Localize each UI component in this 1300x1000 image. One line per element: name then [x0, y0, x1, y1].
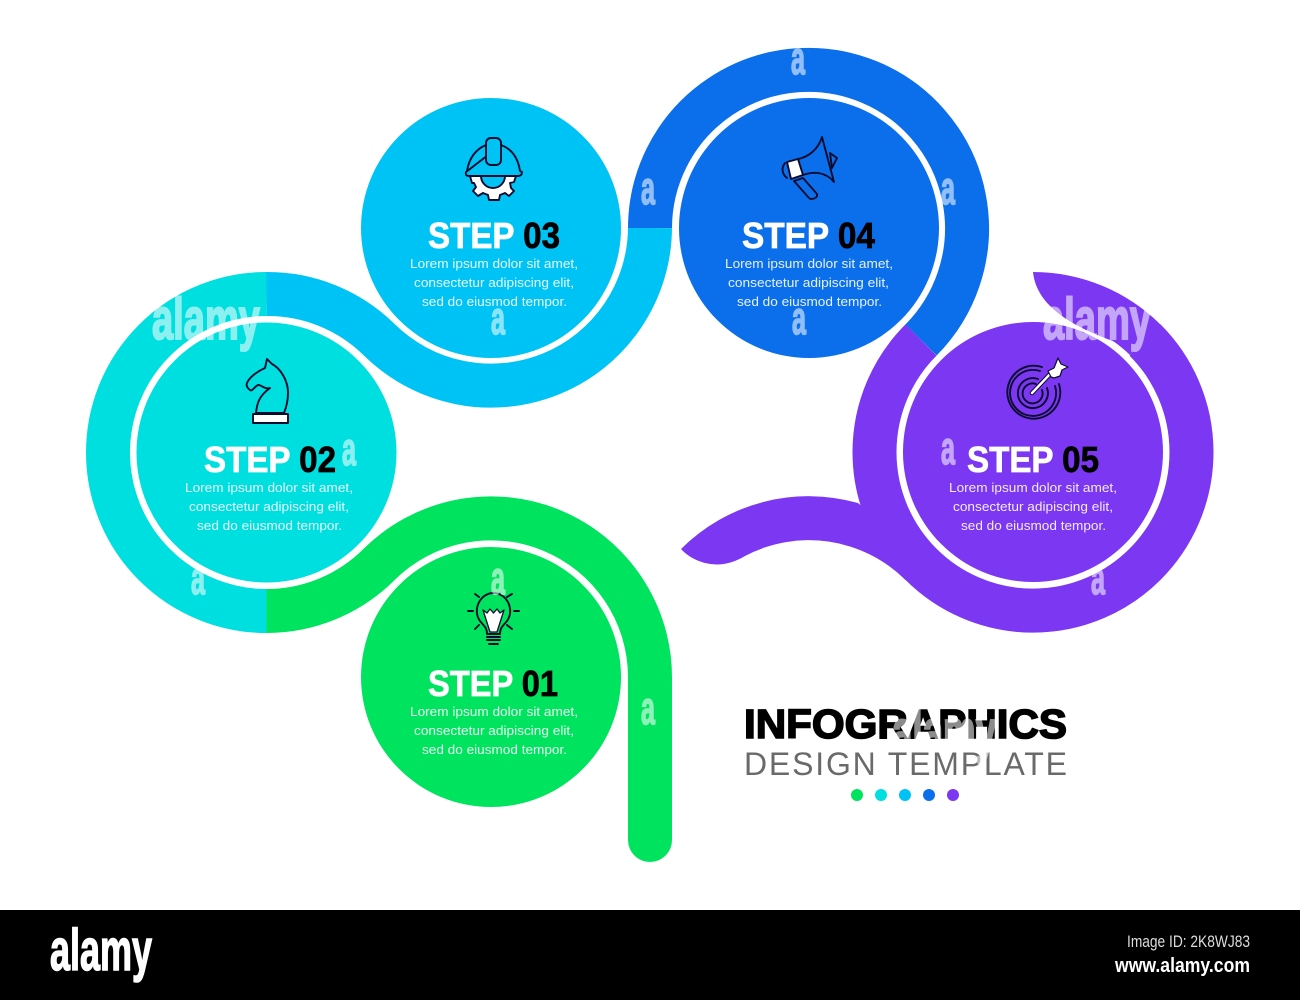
text: step 04 description: sed do eiusmod tempor.	[737, 294, 882, 309]
text: step 01 description	[410, 704, 578, 757]
icon: light bulb	[468, 593, 519, 644]
watermark overlay: alamy	[152, 287, 260, 352]
text: step 05 description	[949, 480, 1117, 533]
watermark overlay: a	[641, 162, 655, 214]
text: step 02 description: Lorem ipsum dolor sit amet,	[185, 480, 353, 495]
text: step 01 description: sed do eiusmod tempor.	[422, 742, 567, 757]
footer url: www.alamy.com	[1114, 955, 1250, 977]
watermark overlay: a	[941, 422, 955, 474]
text: step 03 description	[410, 256, 578, 309]
text: step 05 description: consectetur adipiscing elit,	[953, 499, 1113, 514]
icon: helmet and gear	[466, 138, 522, 200]
watermark overlay: a	[791, 32, 805, 84]
text: step 02 description: sed do eiusmod tempor.	[197, 518, 342, 533]
heading: step 02: STEP 02	[204, 439, 336, 480]
watermark overlay: a	[342, 423, 356, 475]
legend dots	[851, 789, 959, 801]
watermark overlay: alamy	[1043, 287, 1151, 352]
text: step 05 description: Lorem ipsum dolor sit amet,	[949, 480, 1117, 495]
text: step 03 description: consectetur adipiscing elit,	[414, 275, 574, 290]
heading: step 03: STEP 03	[428, 215, 560, 256]
ribbon: green band	[266, 518, 650, 840]
watermark overlay: a	[792, 292, 806, 344]
text: step 03 description: sed do eiusmod tempor.	[422, 294, 567, 309]
ribbon: turquoise band	[108, 294, 266, 611]
watermark overlay: a	[491, 292, 505, 344]
watermark overlay: a	[641, 682, 655, 734]
text: step 04 description: Lorem ipsum dolor sit amet,	[725, 256, 893, 271]
icon: target with arrow	[1007, 358, 1068, 419]
heading: step 04: STEP 04	[742, 215, 875, 256]
title	[744, 701, 1067, 782]
title: INFOGRAPHICS	[744, 701, 1067, 747]
watermark overlay: a	[1091, 552, 1105, 604]
watermark overlay: alamy	[892, 699, 996, 764]
text: step 02 description: consectetur adipiscing elit,	[189, 499, 349, 514]
icon: chess knight	[247, 359, 288, 423]
watermark overlay: a	[941, 162, 955, 214]
text: step 02 description	[185, 480, 353, 533]
ribbon: purple band	[681, 272, 1192, 611]
heading: step 05: STEP 05	[967, 439, 1099, 480]
watermark overlay	[152, 32, 1151, 764]
text: step 01 description: Lorem ipsum dolor sit amet,	[410, 704, 578, 719]
ribbon end cap	[628, 818, 672, 862]
ribbon: sky band	[266, 228, 650, 386]
panel: step 04	[679, 98, 939, 358]
panel: step 03	[361, 98, 621, 358]
text: step 01 description: consectetur adipiscing elit,	[414, 723, 574, 738]
title: DESIGN TEMPLATE	[744, 746, 1067, 782]
watermark overlay: a	[491, 552, 505, 604]
text: step 04 description	[725, 256, 893, 309]
panel: step 05	[903, 322, 1163, 582]
text: step 03 description: Lorem ipsum dolor sit amet,	[410, 256, 578, 271]
text: step 04 description: consectetur adipiscing elit,	[728, 275, 889, 290]
watermark overlay: a	[191, 552, 205, 604]
icon: megaphone	[783, 137, 837, 199]
panel: step 02	[136, 322, 396, 582]
footer bar	[0, 910, 1300, 1000]
ribbon: blue band	[650, 70, 967, 340]
text: step 05 description: sed do eiusmod tempor.	[961, 518, 1106, 533]
footer image id: Image ID: 2K8WJ83	[1127, 932, 1250, 951]
heading: step 01: STEP 01	[428, 663, 558, 704]
panel: step 01	[361, 547, 621, 807]
footer logo: alamy	[50, 918, 152, 983]
